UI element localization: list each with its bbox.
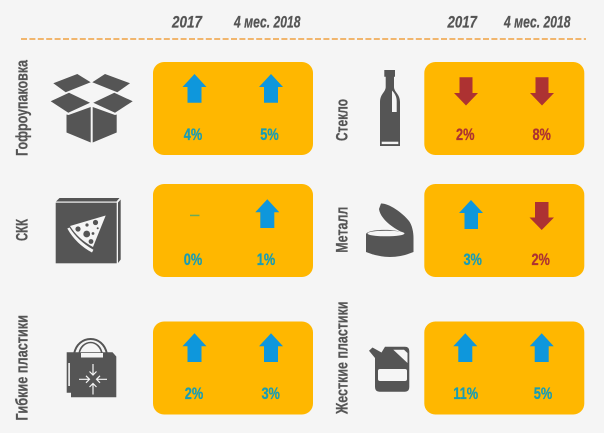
value 2%: 2%: [531, 251, 550, 269]
icon: pizza box: [56, 198, 121, 263]
panel: Гофроупаковка values: [153, 62, 313, 155]
arrow up 2017: [459, 200, 483, 229]
label: Металл: Металл: [334, 207, 352, 253]
arrow up 2018: [259, 74, 283, 103]
value 11%: 11%: [453, 385, 478, 403]
row: Стекло: [334, 62, 584, 155]
panel: Металл values: [424, 184, 584, 277]
dash no change: [190, 215, 200, 216]
arrow up 2018: [530, 333, 554, 362]
arrow down 2018: [530, 77, 554, 106]
arrow up 2017: [182, 333, 206, 362]
arrow down 2018: [530, 202, 554, 230]
value 1%: 1%: [257, 251, 275, 269]
label: Жесткие пластики: Жесткие пластики: [334, 301, 352, 415]
value 5%: 5%: [534, 385, 552, 403]
panel: Стекло values: [424, 62, 584, 155]
panel: Гибкие пластики values: [153, 322, 313, 414]
icon: open can: [366, 203, 414, 257]
icon: canister: [369, 347, 409, 392]
value 5%: 5%: [260, 126, 279, 144]
value 3%: 3%: [463, 251, 482, 269]
header: right columns: 4 мес. 2018: [503, 14, 571, 32]
arrow up 2018: [255, 199, 279, 228]
panel: СКК values: [153, 184, 313, 277]
arrow up 2017: [453, 333, 477, 362]
label: Гофроупаковка: Гофроупаковка: [14, 59, 32, 156]
label: Гибкие пластики: Гибкие пластики: [14, 315, 32, 420]
value 3%: 3%: [261, 385, 280, 403]
row: СКК: [14, 184, 313, 277]
value 8%: 8%: [532, 126, 551, 144]
row: Гофроупаковка: [14, 59, 313, 156]
value 2%: 2%: [456, 126, 475, 144]
icon: open box: [51, 74, 133, 142]
row: Металл: [334, 184, 584, 277]
label: СКК: СКК: [14, 218, 32, 241]
header: right columns: 2017: [447, 14, 478, 32]
icon: bottle: [380, 70, 400, 146]
row: Жесткие пластики: [334, 302, 584, 415]
header: left columns: 4 мес. 2018: [233, 14, 301, 32]
value 0%: 0%: [184, 251, 202, 269]
label: Стекло: Стекло: [334, 99, 352, 141]
header: left columns: 2017: [171, 14, 203, 32]
header: right columns: [447, 14, 571, 32]
value 2%: 2%: [185, 385, 203, 403]
arrow down 2017: [454, 77, 478, 106]
icon: shopping bag: [67, 339, 116, 397]
arrow up 2017: [182, 74, 206, 103]
header: left columns: [171, 14, 301, 32]
panel: Жесткие пластики values: [424, 322, 584, 414]
arrow up 2018: [259, 333, 283, 362]
value 4%: 4%: [184, 126, 202, 144]
row: Гибкие пластики: [14, 315, 313, 420]
